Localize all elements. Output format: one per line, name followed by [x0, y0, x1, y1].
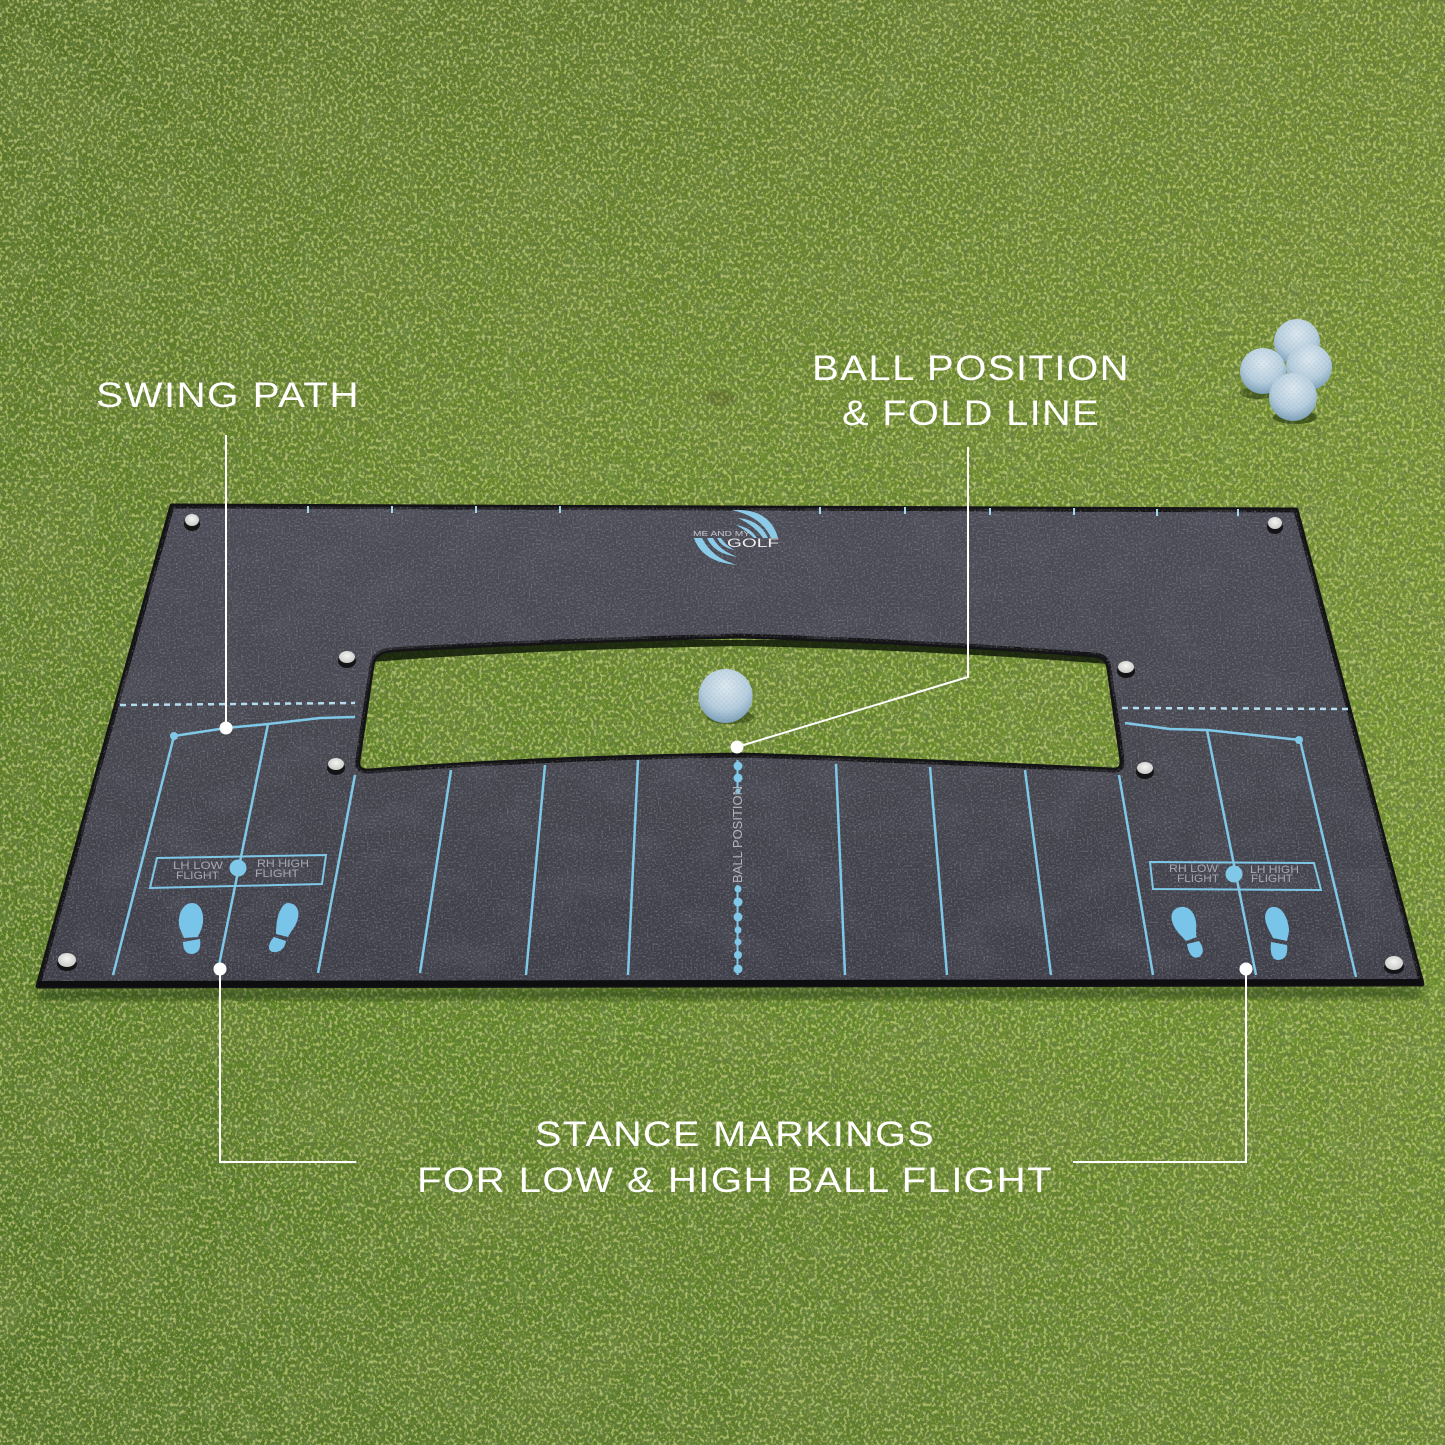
fold line: dashed markers	[120, 703, 1350, 709]
right stance footprints	[1171, 907, 1289, 960]
right flight box	[1150, 736, 1321, 890]
centre golf ball	[698, 669, 754, 724]
logo: Me and My Golf: ME AND MY	[693, 531, 750, 538]
left flight box: LH LOW	[173, 860, 224, 872]
callout: ball position and fold line	[730, 349, 1130, 754]
logo: Me and My Golf: GOLF	[727, 536, 779, 550]
mat shadow	[38, 988, 1422, 1000]
right flight box: FLIGHT	[1251, 873, 1293, 885]
callout: swing path	[96, 376, 360, 734]
logo: Me and My Golf	[693, 510, 779, 565]
hole top shadow	[372, 640, 1108, 664]
callout: stance markings: STANCE MARKINGS	[535, 1115, 935, 1154]
left flight box: FLIGHT	[176, 870, 219, 882]
left stance footprints	[179, 903, 299, 954]
ball position guide lines	[318, 760, 1153, 975]
right flight box: LH HIGH	[1250, 864, 1299, 876]
bottom edge	[38, 982, 1422, 984]
callout: ball position and fold line: BALL POSITION	[812, 349, 1130, 388]
swing path lines	[113, 717, 1356, 977]
magnets	[57, 514, 1404, 974]
right flight box: RH LOW	[1169, 863, 1219, 875]
pile of golf balls	[1240, 319, 1332, 424]
cloth texture	[30, 500, 1430, 990]
ball position vertical label: BALL POSITION	[731, 786, 745, 883]
left flight box: FLIGHT	[255, 868, 299, 880]
callout: swing path: SWING PATH	[96, 376, 360, 415]
mat body	[38, 506, 1422, 986]
left flight box	[150, 732, 326, 888]
callout: stance markings	[214, 962, 1252, 1200]
center ball position dotted line	[734, 760, 742, 975]
top edge tick marks	[226, 506, 1238, 516]
practice mat	[30, 500, 1430, 1000]
left flight box: RH HIGH	[257, 858, 309, 870]
right flight box: FLIGHT	[1177, 873, 1219, 885]
callout: ball position and fold line: & FOLD LINE	[842, 394, 1100, 433]
callout: stance markings: FOR LOW & HIGH BALL FLIGHT	[417, 1161, 1053, 1200]
